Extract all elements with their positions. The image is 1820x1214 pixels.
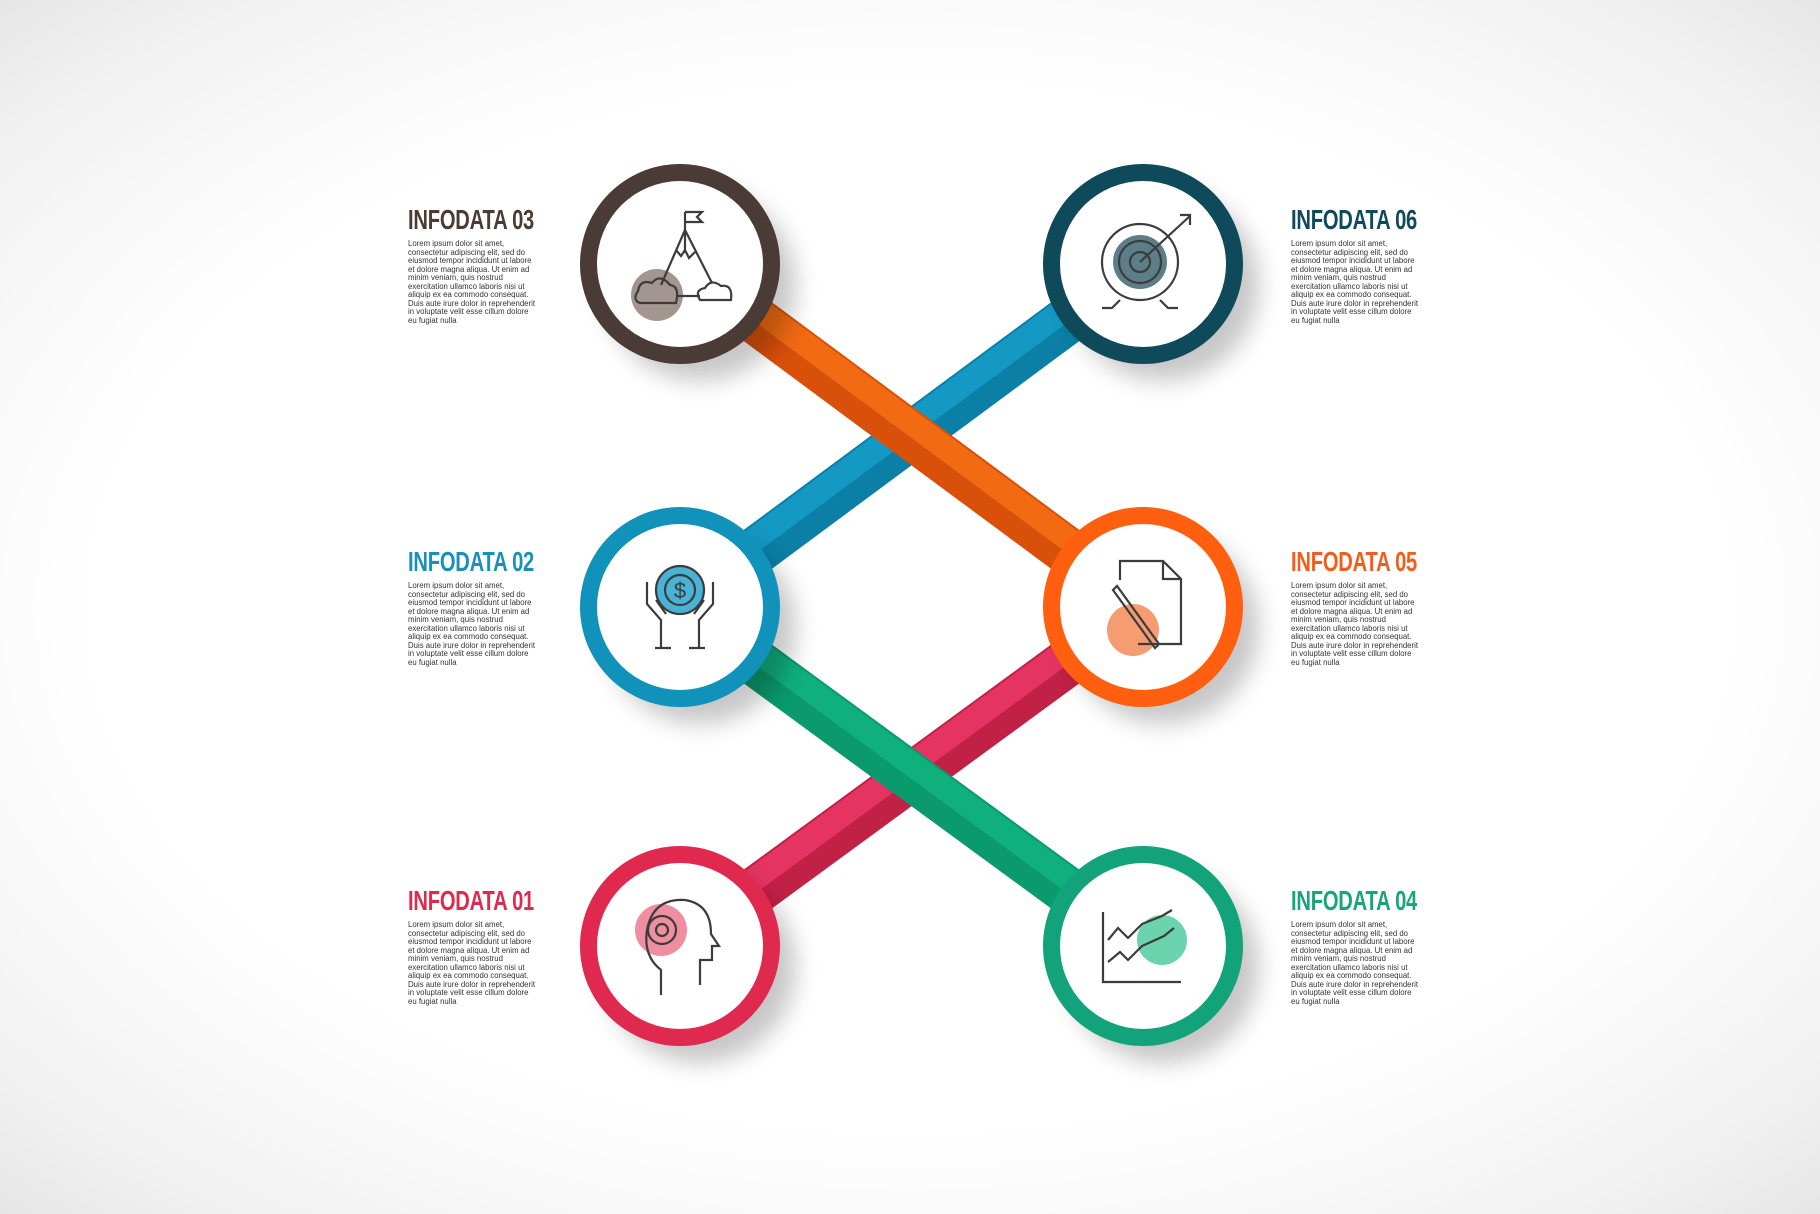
circle 05 xyxy=(1043,507,1243,707)
circle 03 xyxy=(580,164,780,364)
circle shadows xyxy=(604,189,1259,1063)
icon: hands with coin: $ xyxy=(674,578,686,603)
icon: hands with coin xyxy=(647,566,713,648)
circle 02 xyxy=(580,507,780,707)
text: infodata 02: INFODATA 02 xyxy=(408,546,534,577)
text: infodata 06: INFODATA 06 xyxy=(1291,204,1417,235)
band: orange 03 to 05 xyxy=(680,256,1149,607)
text: infodata 05: INFODATA 05 xyxy=(1291,546,1417,577)
text: infodata 01: Lorem ipsum dolor sit amet, consectetur adipiscing elit, sed do eiusmod tempor incididunt ut labore et dolore magna aliqua. Ut enim ad minim veniam, quis nostrud exercitation ullamco laboris nisi ut aliquip ex ea commodo consequat. Duis aute irure dolor in reprehenderit in voluptate velit esse cillum dolore eu fugiat nulla xyxy=(408,920,535,1006)
band: green 02 to 04 xyxy=(680,599,1149,946)
circle 04 xyxy=(1043,846,1243,1046)
circle 01 xyxy=(580,846,780,1046)
text: infodata 05: Lorem ipsum dolor sit amet, consectetur adipiscing elit, sed do eiusmod tempor incididunt ut labore et dolore magna aliqua. Ut enim ad minim veniam, quis nostrud exercitation ullamco laboris nisi ut aliquip ex ea commodo consequat. Duis aute irure dolor in reprehenderit in voluptate velit esse cillum dolore eu fugiat nulla xyxy=(1291,581,1418,666)
icon: head with gear xyxy=(635,900,719,995)
text: infodata 01: INFODATA 01 xyxy=(408,885,534,916)
text: infodata 04: Lorem ipsum dolor sit amet, consectetur adipiscing elit, sed do eiusmod tempor incididunt ut labore et dolore magna aliqua. Ut enim ad minim veniam, quis nostrud exercitation ullamco laboris nisi ut aliquip ex ea commodo consequat. Duis aute irure dolor in reprehenderit in voluptate velit esse cillum dolore eu fugiat nulla xyxy=(1291,920,1418,1006)
text: infodata 03: Lorem ipsum dolor sit amet, consectetur adipiscing elit, sed do eiusmod tempor incididunt ut labore et dolore magna aliqua. Ut enim ad minim veniam, quis nostrud exercitation ullamco laboris nisi ut aliquip ex ea commodo consequat. Duis aute irure dolor in reprehenderit in voluptate velit esse cillum dolore eu fugiat nulla xyxy=(408,239,535,324)
icon: document pen xyxy=(1107,561,1181,656)
text: infodata 06: Lorem ipsum dolor sit amet, consectetur adipiscing elit, sed do eiusmod tempor incididunt ut labore et dolore magna aliqua. Ut enim ad minim veniam, quis nostrud exercitation ullamco laboris nisi ut aliquip ex ea commodo consequat. Duis aute irure dolor in reprehenderit in voluptate velit esse cillum dolore eu fugiat nulla xyxy=(1291,239,1418,324)
icon: chart arrows xyxy=(1103,910,1187,982)
text: infodata 03: INFODATA 03 xyxy=(408,204,534,235)
text: infodata 02: Lorem ipsum dolor sit amet, consectetur adipiscing elit, sed do eiusmod tempor incididunt ut labore et dolore magna aliqua. Ut enim ad minim veniam, quis nostrud exercitation ullamco laboris nisi ut aliquip ex ea commodo consequat. Duis aute irure dolor in reprehenderit in voluptate velit esse cillum dolore eu fugiat nulla xyxy=(408,581,535,666)
band: pink 01 to 05 xyxy=(674,599,1143,946)
band: blue 02 to 06 xyxy=(674,256,1143,607)
icon: target arrow xyxy=(1102,215,1190,308)
circle 06 xyxy=(1043,164,1243,364)
icon: mountain flag clouds xyxy=(631,212,731,321)
text: infodata 04: INFODATA 04 xyxy=(1291,885,1417,916)
